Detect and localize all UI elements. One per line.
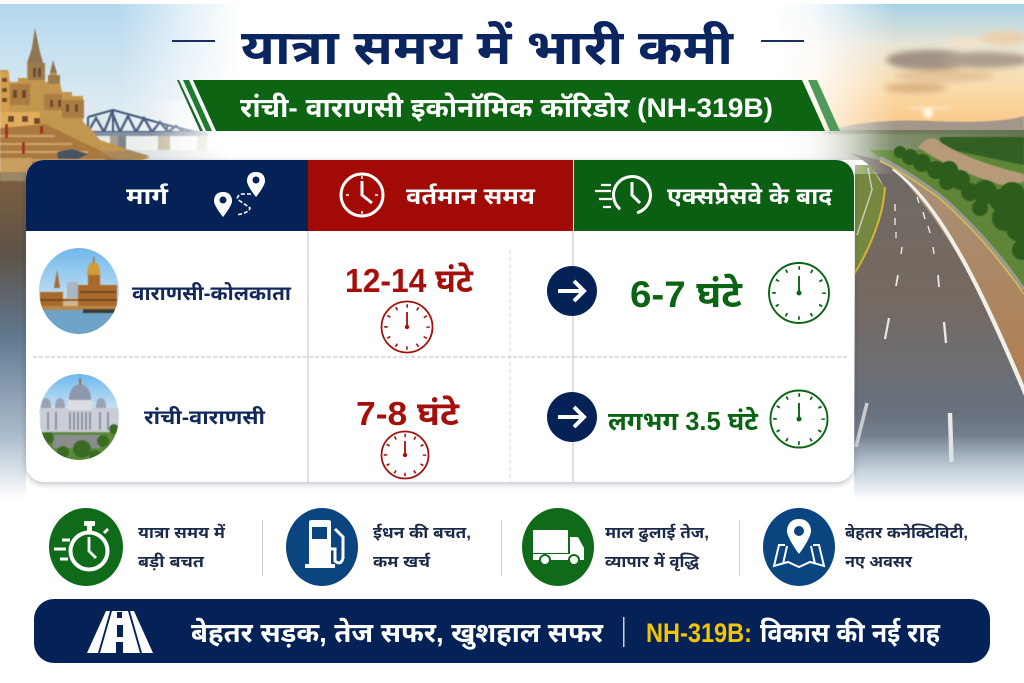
left scene: Varanasi ghats and bridge [0, 4, 248, 500]
header: after expressway: एक्सप्रेसवे के बाद [667, 183, 833, 209]
icon: arrow circle [547, 266, 597, 316]
thumbnail: Ranchi domed building [39, 374, 119, 462]
second road [918, 138, 1024, 186]
header: current time: वर्तमान समय [406, 183, 535, 209]
subtitle ribbon: रांची- वाराणसी इकोनॉमिक कॉरिडोर (NH-319B) [240, 93, 773, 123]
icon: truck [522, 508, 594, 586]
footer banner [34, 599, 990, 663]
icon: road [87, 611, 153, 653]
header: current time [341, 174, 535, 216]
title: यात्रा समय में भारी कमी [241, 20, 734, 75]
benefit: fuel saving [286, 508, 471, 586]
panel: comparison table [26, 160, 854, 482]
lane dashes [856, 197, 952, 462]
row 2: Ranchi-Varanasi: रांची-वाराणसी [144, 405, 266, 429]
highway road surface [845, 152, 1024, 500]
benefit: fuel saving: कम खर्च [373, 552, 431, 571]
table header [26, 160, 854, 231]
footer banner: NH-319B: [646, 618, 752, 648]
ghat buildings [0, 28, 150, 172]
icon: fuel pump [286, 508, 358, 586]
benefit: time saving [49, 508, 226, 586]
icon: map pin [763, 508, 835, 586]
white bottom area [0, 500, 1024, 683]
right scene: expressway at sunset [770, 4, 1024, 500]
row 2: Ranchi-Varanasi [39, 374, 828, 478]
row 1: Varanasi-Kolkata: 12-14 घंटे [345, 261, 474, 299]
road edge line [892, 168, 1024, 396]
row 1: Varanasi-Kolkata: वाराणसी-कोलकाता [132, 281, 292, 305]
benefit: connectivity: बेहतर कनेक्टिविटी, [845, 523, 968, 542]
icon: bridge [88, 110, 208, 157]
benefit: fuel saving: ईधन की बचत, [373, 523, 471, 542]
row 2: Ranchi-Varanasi: लगभग 3.5 घंटे [608, 406, 759, 436]
icon: stopwatch [49, 508, 123, 586]
guardrail [880, 158, 1024, 290]
header: after expressway [595, 169, 833, 221]
benefit: faster freight: माल ढुलाई तेज, [605, 523, 709, 543]
green roadside land [870, 150, 1024, 320]
header: route [126, 172, 265, 217]
icon: arrow circle [547, 392, 597, 442]
row 2: Ranchi-Varanasi: 7-8 घंटे [356, 394, 460, 432]
benefit: faster freight [522, 508, 709, 586]
icon: green clock [770, 390, 828, 448]
benefit: faster freight: व्यापार में वृद्धि [604, 552, 700, 572]
benefit: time saving: यात्रा समय में [138, 523, 226, 542]
icon: green clock [769, 263, 829, 323]
footer banner: बेहतर सड़क, तेज सफर, खुशहाल सफर [191, 617, 604, 649]
benefit: connectivity [763, 508, 968, 586]
benefit: connectivity: नए अवसर [845, 554, 913, 571]
row 1: Varanasi-Kolkata: 6-7 घंटे [630, 273, 743, 315]
footer banner: विकास की नई राह [760, 617, 941, 648]
icon: red clock [382, 302, 432, 352]
icon: red clock [382, 432, 428, 478]
thumbnail: Kolkata riverfront [39, 248, 119, 335]
road shoulder [879, 160, 1024, 390]
benefit: time saving: बड़ी बचत [138, 553, 205, 571]
trees [894, 146, 1024, 260]
row 1: Varanasi-Kolkata [39, 248, 829, 352]
header: route: मार्ग [126, 183, 169, 209]
subtitle ribbon [177, 80, 840, 131]
